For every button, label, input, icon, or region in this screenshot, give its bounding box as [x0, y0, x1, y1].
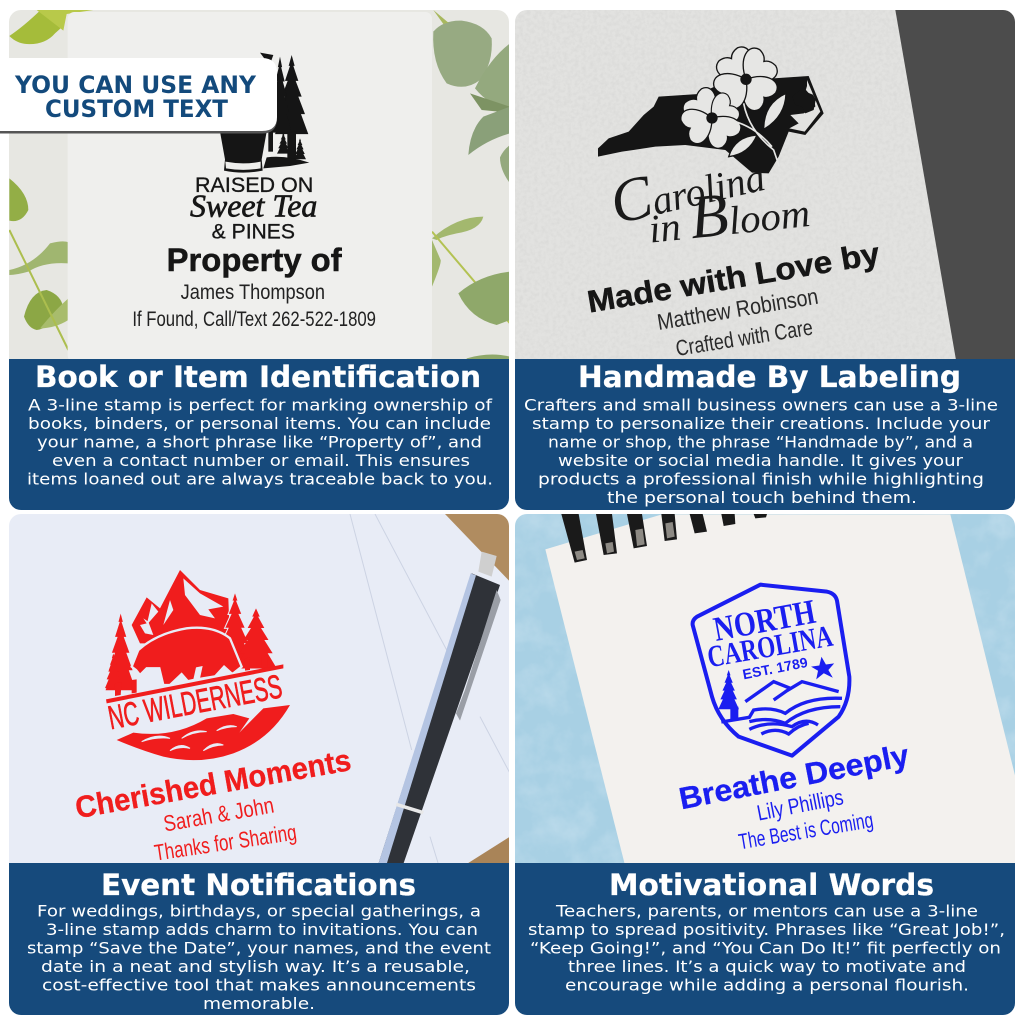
body text: memorable.: [203, 995, 315, 1013]
body text: A 3-line stamp is perfect for marking ownership of: [28, 396, 493, 414]
body text: [27, 902, 491, 1013]
body text: 3-line stamp adds charm to invitations. You can: [46, 921, 478, 939]
body text: books, binders, or personal items. You can include: [28, 415, 491, 433]
body text: three lines. It’s a quick way to motivate and: [568, 958, 966, 976]
text: the best is coming: The Best is Coming: [737, 807, 875, 854]
body text: date in a neat and stylish way. It’s a reusable,: [41, 958, 470, 976]
stamp: raised on sweet tea: [132, 53, 376, 331]
text: established 1789: EST. 1789: [741, 654, 809, 682]
icon: pine tree: [718, 670, 739, 721]
text: north: NORTH: [711, 593, 818, 649]
body text: items loaned out are always traceable back to you.: [27, 470, 493, 488]
body text: the personal touch behind them.: [607, 489, 917, 507]
text: carolina: Carolina: [604, 137, 770, 238]
icon: pen: [378, 552, 501, 864]
text: crafted with care: Crafted with Care: [674, 315, 814, 361]
badge line one: YOU CAN USE ANY: [14, 71, 257, 99]
body text: website or social media handle. It gives your: [558, 452, 964, 470]
icon: mountains, trees and bear: [105, 570, 283, 703]
badge line two: CUSTOM TEXT: [45, 95, 229, 123]
body text: Crafters and small business owners can use a 3-line: [524, 396, 998, 414]
text: sarah and john: Sarah & John: [161, 792, 276, 837]
text: thanks for sharing: Thanks for Sharing: [153, 819, 298, 866]
text: phone line: If Found, Call/Text 262-522-1809: [132, 307, 376, 331]
body text: even a contact number or email. This ensures: [52, 452, 470, 470]
text: matthew robinson: Matthew Robinson: [655, 283, 820, 335]
body text: encourage while adding a personal flourish.: [565, 976, 969, 994]
text: in bloom: in Bloom: [645, 172, 813, 257]
text: breathe deeply: Breathe Deeply: [676, 738, 912, 816]
text: property of: Property of: [167, 241, 342, 278]
caption box: [9, 359, 509, 510]
body text: products a professional finish while highlighting: [538, 470, 984, 488]
text: lily phillips: Lily Phillips: [755, 784, 845, 826]
panel: event notifications: [9, 514, 510, 1015]
text: nc wilderness: NC WILDERNESS: [105, 668, 285, 737]
body text: cost-effective tool that makes announcements: [42, 976, 476, 994]
body text: name or shop, the phrase “Handmade by”, and a: [548, 434, 973, 452]
icon: water waves: [117, 705, 290, 760]
caption box: [515, 359, 1015, 510]
panel: handmade by labeling: [515, 10, 1015, 510]
photo: spiral notebook on blue background: [515, 514, 1015, 864]
body text: [528, 902, 1005, 994]
heading: Book or Item Identification: [35, 360, 481, 394]
body text: Teachers, parents, or mentors can use a 3-line: [555, 902, 978, 920]
text: raised on: RAISED ON: [195, 173, 313, 197]
body text: For weddings, birthdays, or special gatherings, a: [37, 902, 481, 920]
text: made with love by: Made with Love by: [585, 236, 883, 320]
icon: shield outline: [693, 585, 849, 756]
heading: Motivational Words: [609, 868, 934, 902]
body text: stamp to personalize their creations. Include your: [532, 415, 991, 433]
stamp: carolina in bloom: [585, 43, 883, 361]
photo: textured paper and dark card: [515, 10, 1015, 360]
stamp: north carolina: [676, 585, 912, 854]
panel: motivational words: [515, 514, 1015, 1015]
text: cherished moments: Cherished Moments: [73, 743, 354, 825]
body text: stamp to spread positivity. Phrases like “Great Job!”,: [528, 921, 1005, 939]
panel: book or item identification: [9, 10, 510, 510]
icon: north carolina state shape: [598, 76, 824, 173]
body text: [524, 396, 998, 507]
photo: paper, wood table and pen: [9, 514, 510, 864]
text: sweet tea: Sweet Tea: [190, 188, 317, 224]
body text: stamp “Save the Date”, your names, and the event: [27, 940, 491, 958]
caption box: [9, 863, 509, 1015]
heading: Handmade By Labeling: [578, 360, 961, 394]
badge: you can use any custom text: [0, 58, 277, 134]
body text: your name, a short phrase like “Property of”, and: [37, 434, 482, 452]
text: carolina: CAROLINA: [705, 619, 835, 674]
body text: [27, 396, 493, 488]
stamp: nc wilderness: [73, 570, 354, 866]
body text: “Keep Going!”, and “You Can Do It!” fit perfectly on: [530, 940, 1001, 958]
icon: star: [810, 655, 836, 681]
icon: pine trees and glass: [220, 53, 309, 173]
icon: spiral binding: [561, 514, 767, 563]
text: and pines: & PINES: [212, 219, 295, 243]
heading: Event Notifications: [101, 868, 416, 902]
photo: paper on eucalyptus leaves: [9, 10, 510, 362]
icon: dogwood flowers: [678, 43, 786, 157]
icon: mountains and waves: [721, 682, 842, 734]
caption box: [515, 863, 1015, 1015]
text: james thompson: James Thompson: [181, 280, 325, 304]
